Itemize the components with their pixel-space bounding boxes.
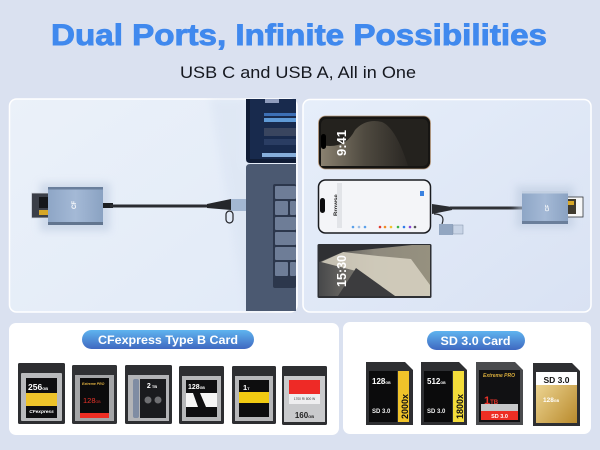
subtitle: USB C and USB A, All in One (180, 63, 416, 82)
card: SD 128GB: SD 3.0 (372, 409, 391, 415)
card: SD 512GB: 512GB (427, 377, 446, 386)
card: SD 3.0 128GB gold (533, 363, 580, 426)
icon: cable and USB-C plug (103, 199, 246, 223)
card: SD 128GB: 2000x (400, 394, 410, 419)
icon: phone top: 9:41 (334, 130, 349, 156)
label: SD 3.0 Card (427, 331, 525, 350)
icon: card reader: CF (545, 205, 551, 211)
icon: laptop (210, 99, 296, 311)
card: 256GB (18, 363, 65, 424)
card: Extreme PRO 128GB (72, 365, 117, 424)
icon: phone middle (318, 180, 430, 233)
card: 128GB black white: 128GB (188, 384, 205, 391)
card: SD 512GB: SD 3.0 (427, 409, 446, 415)
panel: SD cards (343, 322, 591, 434)
card: SD Extreme PRO 1TB (476, 362, 523, 425)
icon: card reader: CF (72, 201, 78, 209)
card: SD Extreme PRO 1TB: Extreme PRO (483, 373, 515, 379)
card: SD 3.0 128GB gold: SD 3.0 (544, 375, 570, 385)
card: Extreme PRO 128GB: Extreme PRO (82, 382, 105, 386)
icon: card reader (516, 186, 583, 228)
card: SD Extreme PRO 1TB: SD 3.0 (491, 414, 508, 420)
icon: cable and USB-A plug (432, 204, 522, 235)
label: CFexpress Type B Card: CFexpress Type B Card (98, 333, 238, 347)
card: 256GB: 256GB (28, 382, 48, 392)
panel: laptop connection (10, 99, 297, 312)
label: SD 3.0 Card: SD 3.0 Card (440, 334, 510, 348)
icon: phone middle: Browse (334, 194, 340, 216)
card: 160GB red (282, 366, 327, 425)
panel: CFexpress cards (9, 323, 339, 435)
panel: phone connection (303, 100, 591, 312)
card: 2TB (125, 365, 172, 424)
card: 160GB red: 160GB (295, 411, 314, 420)
card: SD 512GB (421, 362, 467, 425)
icon: phone bottom (318, 244, 432, 298)
card: 128GB black white (179, 366, 224, 424)
card: SD 128GB (366, 362, 413, 425)
card: Extreme PRO 128GB: 128GB (83, 396, 101, 405)
card: 2TB: 2 TB (147, 383, 157, 390)
card: 256GB: CFexpress (29, 409, 54, 415)
card: SD 3.0 128GB gold: 128GB (543, 397, 560, 404)
icon: phone bottom: 15:30 (335, 255, 349, 287)
card: SD 128GB: 128GB (372, 377, 391, 386)
card: SD 512GB: 1800x (455, 394, 465, 419)
title: Dual Ports, Infinite Possibilities (51, 19, 547, 52)
card: 1T yellow: 1T (243, 383, 250, 392)
icon: phone top (318, 116, 430, 169)
icon: card reader (32, 183, 110, 231)
label: CFexpress Type B Card (82, 330, 254, 349)
card: 160GB red: 1700 R/ 800 W (294, 397, 315, 401)
card: SD Extreme PRO 1TB: 1TB (484, 395, 499, 407)
card: 1T yellow (232, 366, 276, 424)
